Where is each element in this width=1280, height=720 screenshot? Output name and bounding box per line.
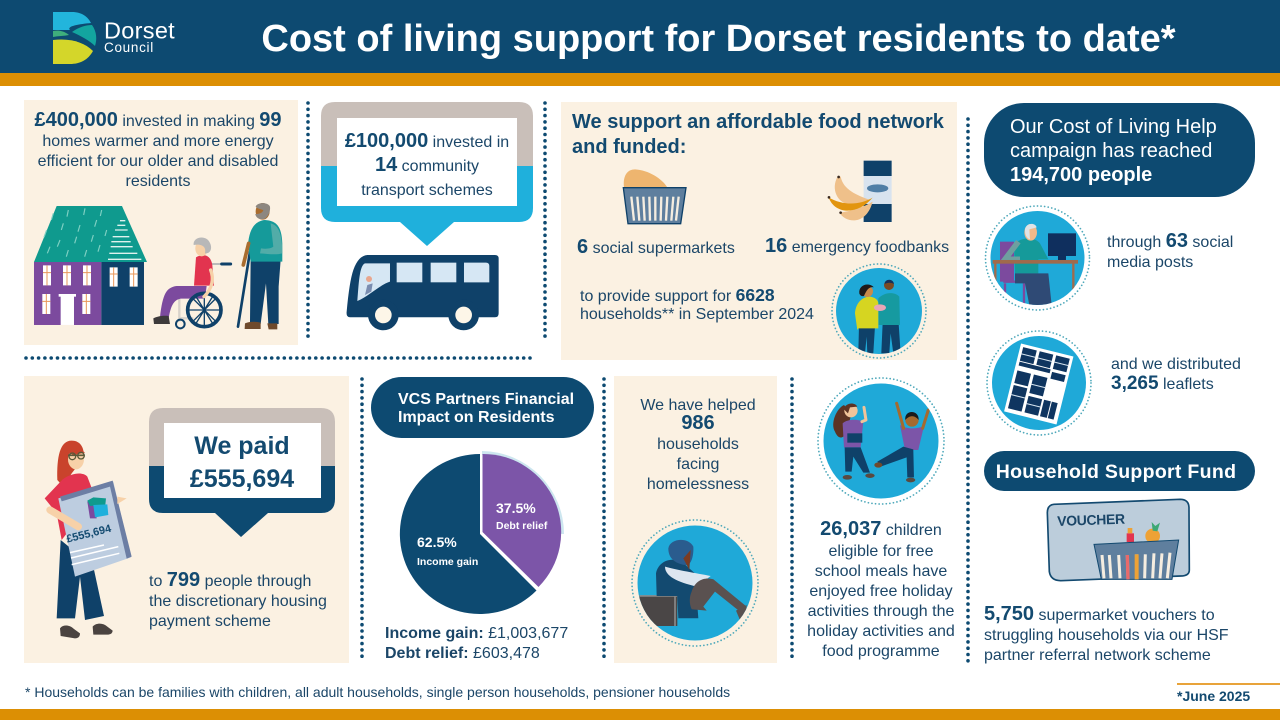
callout: we paid bbox=[149, 408, 335, 537]
food stats: 16 emergency foodbanks bbox=[765, 235, 949, 257]
pie chart bbox=[400, 451, 564, 614]
icon: bananas and tin bbox=[828, 161, 892, 222]
heading pill: VCS partners bbox=[371, 377, 594, 438]
icon: man at computer bbox=[986, 206, 1090, 310]
homelessness text: homelessness bbox=[647, 476, 749, 493]
logo: Dorset Council: Dorset bbox=[104, 18, 175, 44]
home energy text: residents bbox=[126, 173, 190, 190]
housing payment text: to 799 people through bbox=[149, 569, 311, 591]
holiday activities text: activities through the bbox=[808, 603, 954, 620]
holiday activities text: school meals have bbox=[815, 563, 947, 580]
transport text: transport schemes bbox=[361, 182, 493, 199]
food network heading: We support an affordable food network bbox=[572, 111, 944, 133]
icon: woman holding cheque bbox=[45, 441, 132, 638]
voucher text: 5,750 supermarket vouchers to bbox=[984, 603, 1215, 625]
date note: *June 2025 bbox=[1177, 688, 1250, 704]
leaflets text: 3,265 leaflets bbox=[1111, 373, 1214, 394]
homelessness text: households bbox=[657, 436, 739, 453]
panel: home energy bbox=[24, 100, 298, 345]
food stats: 6 social supermarkets bbox=[577, 236, 735, 258]
date note bbox=[1177, 683, 1280, 704]
pie legend values: Debt relief: bbox=[385, 645, 469, 662]
heading pill: household support fund: Household Support Fund bbox=[996, 461, 1236, 483]
icon: woman holding cheque: £555,694 bbox=[65, 523, 113, 546]
callout: transport bbox=[321, 102, 533, 246]
pie labels: 37.5% bbox=[496, 500, 536, 516]
voucher text: struggling households via our HSF bbox=[984, 627, 1229, 644]
home energy text: efficient for our older and disabled bbox=[38, 153, 278, 170]
footer band bbox=[0, 709, 1280, 720]
heading pill: household support fund bbox=[984, 451, 1255, 491]
transport text: 14 community bbox=[375, 154, 479, 176]
icon: voucher with basket bbox=[1047, 499, 1189, 581]
icon: house bbox=[34, 206, 147, 325]
heading pill: campaign reach: Our Cost of Living Help bbox=[1010, 116, 1217, 138]
voucher text: partner referral network scheme bbox=[984, 647, 1211, 664]
holiday activities text: food programme bbox=[822, 643, 940, 660]
icon: voucher with basket: VOUCHER bbox=[1057, 511, 1125, 529]
callout: we paid: £555,694 bbox=[190, 465, 294, 493]
icon: couple in circle bbox=[832, 264, 926, 358]
social media text: through 63 social bbox=[1107, 230, 1233, 252]
home energy text: £400,000 invested in making 99 bbox=[34, 109, 282, 131]
icon: person sitting bbox=[632, 520, 758, 646]
callout: we paid: We paid bbox=[194, 432, 290, 460]
icon: basket of bread bbox=[623, 169, 686, 224]
header band bbox=[0, 0, 1280, 86]
pie labels: 62.5% bbox=[417, 534, 457, 550]
heading pill: VCS partners: Impact on Residents bbox=[398, 409, 555, 426]
pie labels: Debt relief bbox=[496, 520, 548, 532]
homelessness text: facing bbox=[677, 456, 719, 473]
icon: leaflet bbox=[987, 331, 1091, 435]
icon: bus bbox=[347, 255, 499, 330]
leaflets text: and we distributed bbox=[1111, 356, 1241, 373]
transport text: £100,000 invested in bbox=[345, 130, 509, 152]
homelessness text: 986 bbox=[681, 412, 715, 434]
pie legend values: £603,478 bbox=[473, 645, 540, 662]
dotted dividers bbox=[26, 103, 968, 662]
panel: housing payment bbox=[24, 376, 349, 663]
pie legend values: Income gain: £1,003,677 bbox=[385, 625, 568, 642]
logo: Dorset Council bbox=[53, 12, 175, 64]
holiday activities text: 26,037 children bbox=[820, 518, 942, 540]
homelessness text: We have helped bbox=[640, 397, 756, 414]
households supported text: households** in September 2024 bbox=[580, 306, 814, 323]
icon: person in wheelchair bbox=[153, 238, 231, 328]
panel: homelessness bbox=[614, 376, 777, 663]
title: Cost of living support for Dorset residents to date* bbox=[261, 18, 1176, 60]
panel: food network bbox=[561, 102, 957, 360]
housing payment text: payment scheme bbox=[149, 613, 271, 630]
home energy text: homes warmer and more energy bbox=[42, 133, 274, 150]
food network heading: and funded: bbox=[572, 136, 686, 158]
housing payment text: the discretionary housing bbox=[149, 593, 327, 610]
pie labels: Income gain bbox=[417, 556, 478, 568]
heading pill: campaign reach bbox=[984, 103, 1255, 197]
heading pill: campaign reach: campaign has reached bbox=[1010, 140, 1212, 162]
icon: children playing bbox=[818, 378, 944, 504]
holiday activities text: holiday activities and bbox=[807, 623, 955, 640]
holiday activities text: enjoyed free holiday bbox=[809, 583, 953, 600]
households supported text: to provide support for 6628 bbox=[580, 285, 775, 305]
pie labels bbox=[417, 500, 548, 568]
holiday activities text: eligible for free bbox=[829, 543, 934, 560]
heading pill: campaign reach: 194,700 people bbox=[1010, 164, 1152, 186]
icon: older man with walking stick bbox=[238, 203, 282, 329]
logo: Dorset Council: Council bbox=[104, 40, 154, 55]
footnote: * Households can be families with children, all adult households, single person households, pensioner households bbox=[25, 684, 730, 700]
heading pill: VCS partners: VCS Partners Financial bbox=[398, 391, 574, 408]
social media text: media posts bbox=[1107, 254, 1193, 271]
